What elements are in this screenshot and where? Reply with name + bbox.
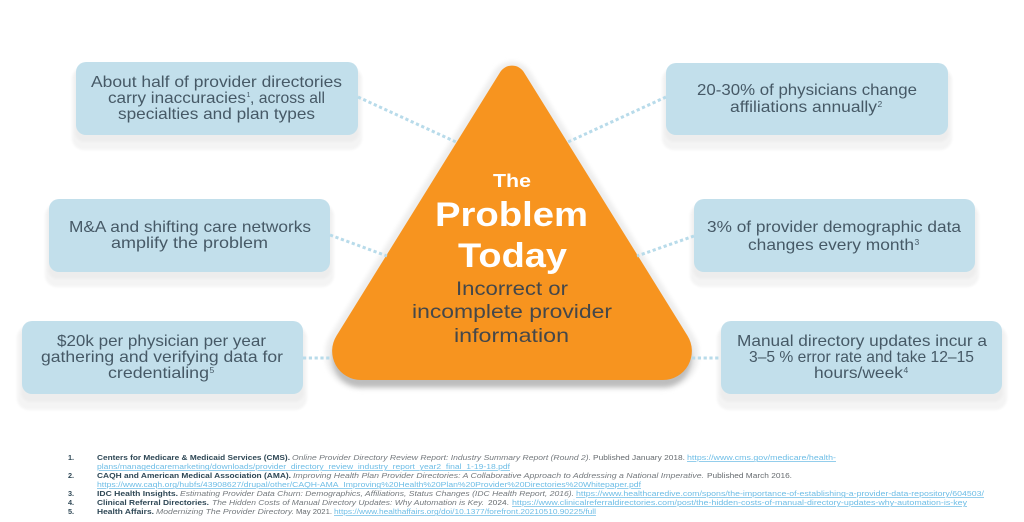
connector: manual updates box to triangle [692, 356, 721, 360]
panel: provider directories inaccuracies: specialties and plan types [118, 106, 315, 123]
footnote 1: Online Provider Directory Review Report: Industry Summary Report (Round 2). [292, 453, 591, 462]
panel: manual directory updates: hours/week [814, 365, 904, 382]
footnote 2: 2. [68, 471, 74, 480]
panel: credentialing cost [17, 321, 307, 410]
footnote 5: Health Affairs. [97, 507, 154, 516]
footnote 4: 2024. [488, 498, 509, 507]
footnote 4: Clinical Referral Directories. [97, 498, 209, 507]
panel: manual directory updates [717, 321, 1007, 410]
triangle heading: Problem [435, 196, 588, 234]
panel: manual directory updates: 4 [904, 365, 908, 375]
footnote 5: Modernizing The Provider Directory. [156, 507, 294, 516]
panel: credentialing cost: gathering and verifying data for [41, 349, 284, 366]
footnote 4: 4. [68, 498, 74, 507]
footnote 2 [68, 471, 792, 489]
panel: demographic data changes: changes every month [748, 237, 914, 254]
footnote 3: IDC Health Insights. [97, 489, 178, 498]
footnote 5 [68, 507, 596, 516]
footnote 1 [68, 453, 837, 471]
panel: demographic data changes: 3% of provider demographic data [707, 219, 961, 236]
panel: provider directories inaccuracies: carry inaccuracies [108, 90, 246, 107]
panel: credentialing cost: $20k per physician per year [57, 333, 267, 350]
panel: credentialing cost: 5 [210, 365, 214, 375]
footnote 1: Centers for Medicare & Medicaid Services (CMS). [97, 453, 290, 462]
footnote 1: https://www.cms.gov/medicare/health- [687, 453, 837, 462]
footnote 2: Published March 2016. [707, 471, 792, 480]
footnote 1: Published January 2018. [593, 453, 685, 462]
panel: M&A and care networks [45, 199, 334, 287]
panel: physician affiliations [662, 63, 952, 150]
panel: credentialing cost: credentialing [108, 365, 209, 382]
footnote 3 [68, 489, 985, 498]
panel: demographic data changes [690, 199, 979, 287]
panel: provider directories inaccuracies: , across all [250, 90, 325, 107]
panel: demographic data changes: 3 [914, 237, 920, 247]
triangle heading [435, 171, 588, 275]
footnotes [68, 453, 985, 516]
triangle subtext: information [454, 325, 569, 347]
connector: M&A box to triangle [330, 235, 387, 256]
panel: M&A and care networks: M&A and shifting care networks [69, 219, 311, 236]
footnote 1: 1. [68, 453, 74, 462]
footnote 5: May 2021. [296, 507, 332, 516]
panel: provider directories inaccuracies: About half of provider directories [91, 74, 342, 91]
panel: provider directories inaccuracies: 1 [246, 92, 250, 99]
footnote 2: https://www.caqh.org/hubfs/43908627/drupal/other/CAQH-AMA_Improving%20Health%20Plan%20Provider%20Directories%20Whitepaper.pdf [97, 480, 642, 489]
connector: cost box to triangle [303, 356, 332, 360]
triangle subtext [412, 278, 613, 347]
panel: provider directories inaccuracies [72, 62, 362, 150]
panel: manual directory updates: 3–5 % error rate and take 12–15 [749, 349, 974, 366]
connector: directories box to triangle [358, 97, 456, 142]
panel: manual directory updates: Manual directory updates incur a [737, 333, 987, 350]
footnote 4: The Hidden Costs of Manual Directory Updates: Why Automation is Key. [212, 498, 484, 507]
connector: demographic box to triangle [637, 236, 694, 256]
footnote 2: Improving Health Plan Provider Directories: A Collaborative Approach to Addressing a National Imperative. [293, 471, 704, 480]
panel: physician affiliations: affiliations annually [730, 99, 877, 116]
triangle subtext: incomplete provider [412, 301, 613, 323]
triangle subtext: Incorrect or [456, 278, 569, 300]
triangle heading: Today [458, 237, 567, 275]
footnote 5: 5. [68, 507, 74, 516]
footnote 3: 3. [68, 489, 74, 498]
panel: physician affiliations: 20-30% of physicians change [697, 82, 917, 99]
footnote 5: https://www.healthaffairs.org/doi/10.1377/forefront.20210510.90225/full [334, 507, 596, 516]
connector: affiliations box to triangle [568, 97, 666, 142]
footnote 1: plans/managedcaremarketing/downloads/provider_directory_review_industry_report_year2_final_1-19-18.pdf [97, 462, 511, 471]
footnote 4 [68, 498, 967, 507]
footnote 3: Estimating Provider Data Churn: Demographics, Affiliations, Status Changes (IDC Health Report, 2016). [180, 489, 574, 498]
triangle heading: The [493, 171, 531, 191]
panel: M&A and care networks: amplify the problem [111, 235, 268, 252]
footnote 4: https://www.clinicalreferraldirectories.com/post/the-hidden-costs-of-manual-directory-updates-why-automation-is-key [512, 498, 967, 507]
footnote 2: CAQH and American Medical Association (AMA). [97, 471, 291, 480]
panel: physician affiliations: 2 [878, 99, 882, 109]
triangle: The Problem Today [332, 66, 692, 387]
footnote 3: https://www.healthcaredive.com/spons/the-importance-of-establishing-a-provider-data-repository/604503/ [576, 489, 985, 498]
